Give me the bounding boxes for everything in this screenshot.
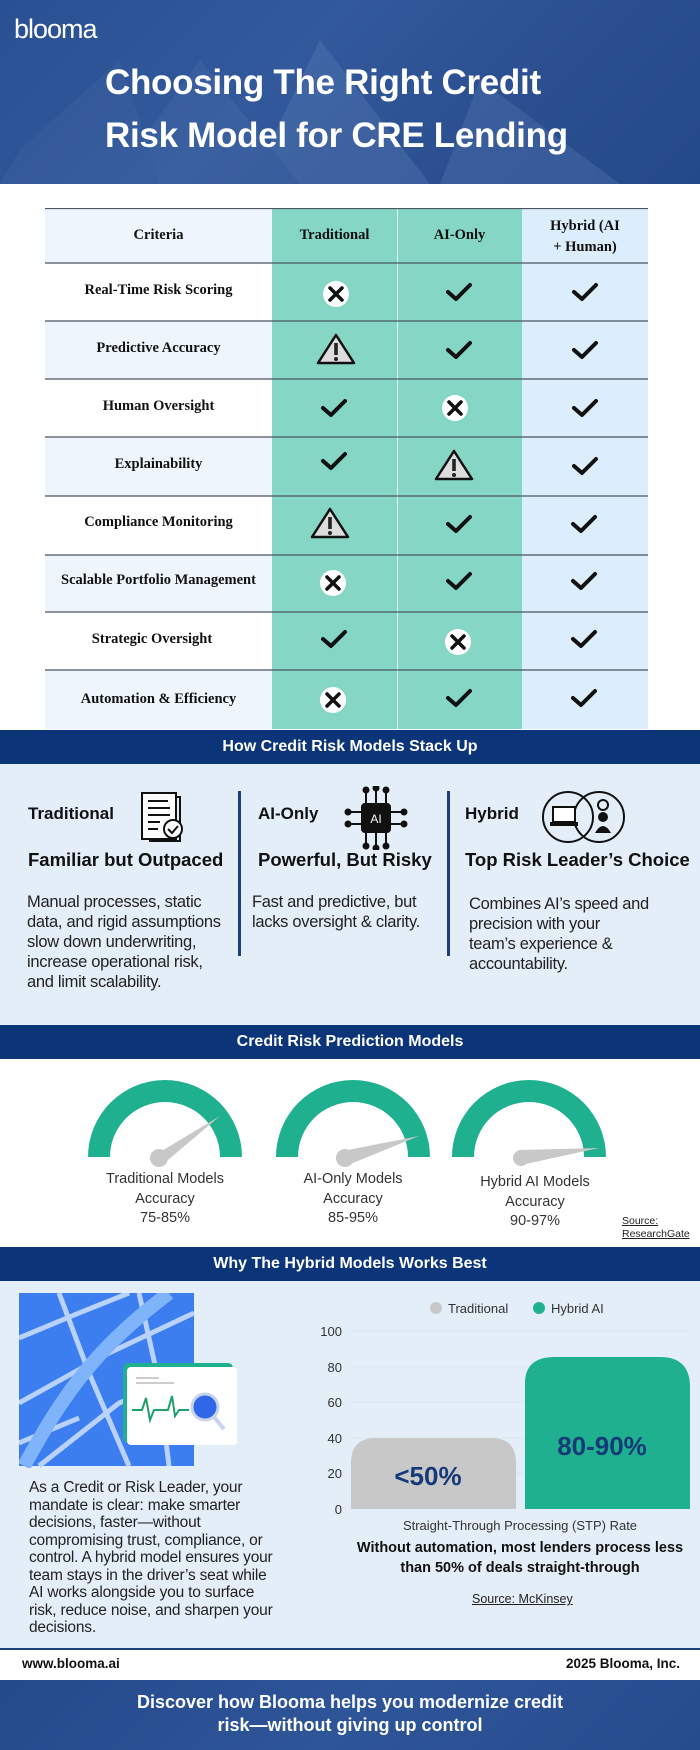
bar chart: STP rate: 80-90% <box>557 1431 647 1461</box>
column: hybrid: Hybrid <box>465 804 519 823</box>
caption: without automation: Without automation, most lenders process less than 50% of deals straight-through <box>357 1540 683 1576</box>
column: traditional: Traditional <box>28 804 114 823</box>
title: Choosing The Right Credit <box>105 63 541 102</box>
text: Hybrid AI Models <box>480 1174 590 1190</box>
band: Credit Risk Prediction Models: Credit Risk Prediction Models <box>237 1033 463 1050</box>
comparison table: Traditional <box>300 227 369 243</box>
row 3 icons <box>323 395 596 421</box>
text: AI-Only Models <box>303 1171 403 1187</box>
bar chart: STP rate <box>320 1301 690 1533</box>
band: How Credit Risk Models Stack Up: How Credit Risk Models Stack Up <box>222 738 478 755</box>
gauge 3 <box>452 1080 606 1166</box>
footer: copyright: 2025 Blooma, Inc. <box>566 1656 680 1671</box>
gauge labels <box>106 1171 224 1226</box>
bar chart: STP rate: 60 <box>328 1395 342 1410</box>
comparison table: Compliance Monitoring <box>84 514 233 530</box>
text: Accuracy <box>505 1194 565 1210</box>
comparison table: Human Oversight <box>103 398 214 414</box>
text: 90-97% <box>510 1213 560 1229</box>
comparison table: + Human) <box>553 239 617 255</box>
gauge labels: 75-85% <box>140 1210 190 1226</box>
panel: model comparison: Manual processes, static <box>27 893 201 911</box>
row 4 icons <box>323 451 596 479</box>
divider 1 <box>238 791 241 956</box>
text: leader mandate: As a Credit or Risk Leader, your <box>29 1479 242 1496</box>
panel: model comparison: Top Risk Leader’s Choice <box>465 849 690 870</box>
comparison table: Automation & Efficiency <box>81 691 236 707</box>
footer: website: www.blooma.ai <box>22 1656 120 1671</box>
bar chart: STP rate: 0 <box>335 1502 342 1517</box>
icon: document <box>141 792 183 842</box>
bar chart: STP rate: 20 <box>328 1466 342 1481</box>
title: Risk Model for CRE Lending <box>105 116 568 155</box>
illustration: map with monitor card <box>19 1293 237 1468</box>
row 1 icons <box>323 281 596 307</box>
source: ResearchGate <box>622 1215 690 1240</box>
source: ResearchGate: Source: <box>622 1215 658 1227</box>
panel: model comparison: Fast and predictive, but <box>252 893 416 911</box>
comparison table: Explainability <box>115 456 202 472</box>
panel: model comparison <box>0 764 700 1025</box>
bottom call to action: Discover how Blooma helps you modernize credit <box>137 1692 563 1712</box>
gauge 2 <box>276 1080 430 1167</box>
bar hybrid <box>525 1357 690 1509</box>
legend <box>430 1301 604 1316</box>
bottom call to action: risk—without giving up control <box>218 1715 482 1735</box>
panel: model comparison: team’s experience & <box>469 935 612 953</box>
text: leader mandate: risk, reduce noise, and sharpen your <box>29 1602 273 1618</box>
criteria labels: Real-Time Risk Scoring <box>85 282 232 298</box>
panel: model comparison: slow down underwriting, <box>27 933 196 951</box>
row 8 icons <box>320 687 595 713</box>
bar chart: STP rate: 80 <box>328 1360 342 1375</box>
logo: blooma <box>14 14 97 44</box>
icon: AI chip: AI <box>370 812 382 826</box>
row 5 icons <box>312 509 595 537</box>
panel: model comparison: data, and rigid assumptions <box>27 913 221 931</box>
panel: model comparison: precision with your <box>469 915 600 933</box>
source: McKinsey: Source: McKinsey <box>472 1592 573 1606</box>
text: leader mandate: AI works alongside you to surface <box>29 1584 254 1601</box>
row 2 icons <box>318 335 596 363</box>
gauge 1 <box>88 1080 242 1167</box>
icon: AI chip <box>344 786 408 850</box>
comparison table: AI-Only <box>434 227 485 243</box>
text: leader mandate: decisions. <box>29 1619 96 1636</box>
band: Credit Risk Prediction Models <box>0 1025 700 1059</box>
comparison table: Hybrid (AI <box>550 218 620 234</box>
panel: model comparison: Familiar but Outpaced <box>28 849 223 870</box>
panel: model comparison: accountability. <box>469 955 568 973</box>
band: How Credit Risk Models Stack Up <box>0 730 700 764</box>
bottom call to action <box>0 1680 700 1750</box>
gauge labels: Accuracy <box>135 1190 195 1206</box>
legend: Hybrid AI <box>551 1301 604 1316</box>
gauges chart <box>88 1080 606 1167</box>
table header text: Criteria <box>134 227 183 243</box>
bar chart: STP rate: 100 <box>320 1324 342 1339</box>
text: leader mandate: compromising trust, compliance, or <box>29 1532 263 1548</box>
divider 2 <box>447 791 450 956</box>
text: 85-95% <box>328 1210 378 1226</box>
legend: Traditional <box>448 1301 508 1316</box>
bar traditional <box>351 1438 516 1509</box>
comparison table <box>45 208 648 729</box>
title <box>105 63 568 155</box>
band: Why The Hybrid Models Works Best <box>0 1247 700 1281</box>
panel: model comparison: Combines AI’s speed and <box>469 895 649 913</box>
panel: model comparison: lacks oversight & clarity. <box>252 913 420 931</box>
row 6 icons <box>320 570 595 596</box>
comparison table: Predictive Accuracy <box>96 340 221 356</box>
bar chart: STP rate: 40 <box>328 1431 342 1446</box>
text: leader mandate: decisions, faster—without <box>29 1514 201 1531</box>
comparison table: Strategic Oversight <box>92 631 212 647</box>
panel: model comparison: Powerful, But Risky <box>258 849 432 870</box>
panel: model comparison: increase operational risk, <box>27 953 203 971</box>
text: leader mandate: mandate is clear: make smarter <box>29 1496 240 1514</box>
header banner <box>0 0 700 184</box>
icon: hybrid circles <box>542 791 625 843</box>
column: AI-only: AI-Only <box>258 804 318 823</box>
band: Why The Hybrid Models Works Best: Why The Hybrid Models Works Best <box>213 1255 487 1272</box>
bar chart: STP rate: Straight-Through Processing (STP) Rate <box>403 1518 637 1533</box>
text: Accuracy <box>323 1190 383 1206</box>
source: ResearchGate: ResearchGate <box>622 1228 690 1240</box>
text: leader mandate: team stays in the driver’s seat while <box>29 1566 267 1584</box>
footer line <box>0 1648 700 1650</box>
text: leader mandate <box>29 1479 273 1636</box>
panel: why hybrid <box>0 1281 700 1648</box>
row 7 icons <box>323 629 595 655</box>
text: leader mandate: control. A hybrid model ensures your <box>29 1549 273 1566</box>
gauge labels: Traditional Models <box>106 1171 224 1187</box>
comparison table: Scalable Portfolio Management <box>61 572 256 588</box>
bar chart: STP rate: <50% <box>394 1461 462 1491</box>
panel: model comparison: and limit scalability. <box>27 973 161 991</box>
